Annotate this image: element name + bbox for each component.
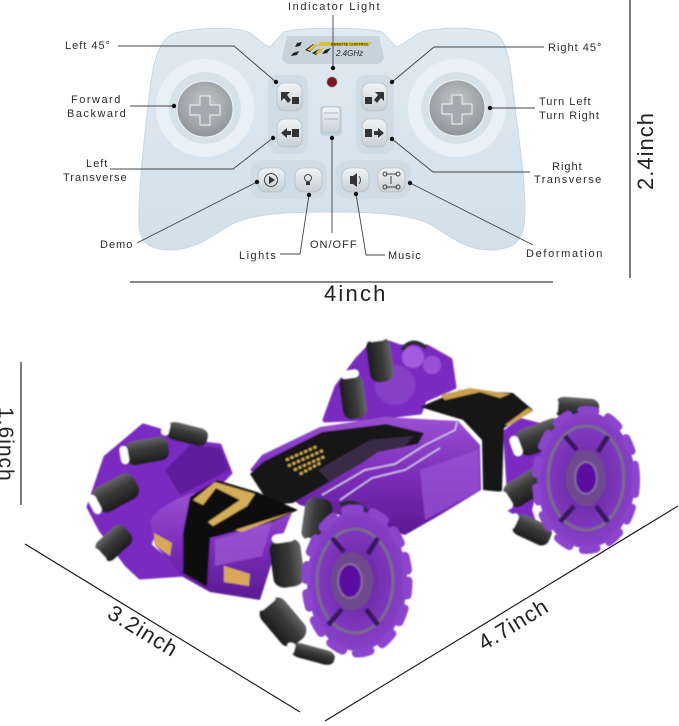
remote labels: Deformation xyxy=(526,248,604,260)
remote labels: Right 45° xyxy=(548,42,602,54)
right wheel back lobe xyxy=(505,420,540,525)
remote labels xyxy=(63,1,604,262)
car xyxy=(84,332,636,667)
remote labels: Transverse xyxy=(63,172,128,184)
remote labels: Demo xyxy=(100,239,133,251)
cockpit xyxy=(250,424,424,505)
rear black band xyxy=(420,390,533,492)
top badge: 2.4GHz xyxy=(335,49,363,58)
front black band xyxy=(183,480,298,587)
front right wheel xyxy=(252,496,408,667)
headlights xyxy=(154,533,250,586)
remote labels: Backward xyxy=(67,108,127,120)
gold checker xyxy=(286,446,326,474)
remote labels: Indicator Light xyxy=(288,1,381,13)
rear far wheel xyxy=(325,332,454,420)
remote labels: Forward xyxy=(71,94,122,106)
leader dots xyxy=(172,66,492,197)
right joystick xyxy=(408,59,506,157)
remote labels: Lights xyxy=(239,250,277,262)
car length dimension: 4.7inch xyxy=(474,593,553,655)
remote labels: Music xyxy=(388,250,422,262)
button wells xyxy=(250,75,411,199)
leader lines xyxy=(110,15,544,255)
circuit lines xyxy=(322,422,457,500)
remote labels: Left xyxy=(86,158,108,170)
remote width dimension: 4inch xyxy=(324,281,388,306)
car length dimension xyxy=(325,506,678,721)
far right wheel xyxy=(495,396,636,550)
front left wheel xyxy=(84,419,231,578)
top badge xyxy=(282,36,384,64)
car depth dimension xyxy=(25,544,300,712)
car depth dimension: 3.2inch xyxy=(103,600,183,662)
button glyphs xyxy=(264,92,400,189)
indicator LED xyxy=(326,76,338,88)
remote labels: Transverse xyxy=(534,174,603,186)
remote labels: Turn Left xyxy=(539,96,592,108)
top badge: REMOTE CONTROL xyxy=(331,42,370,46)
front section xyxy=(150,493,293,600)
remote control xyxy=(139,28,525,250)
front gold trim xyxy=(193,482,295,532)
remote labels: ON/OFF xyxy=(310,239,358,251)
main car body xyxy=(250,417,481,535)
power switch xyxy=(320,106,342,136)
rear gold trim xyxy=(440,388,533,425)
remote labels: Right xyxy=(552,161,583,173)
direction buttons xyxy=(258,83,405,192)
front highlight xyxy=(215,522,272,566)
body highlights xyxy=(420,450,480,520)
remote height dimension: 2.4inch xyxy=(633,112,658,190)
remote body xyxy=(139,28,525,250)
remote labels: Left 45° xyxy=(65,40,111,52)
remote labels: Turn Right xyxy=(539,110,600,122)
left joystick xyxy=(156,59,254,157)
cockpit window xyxy=(318,436,414,482)
